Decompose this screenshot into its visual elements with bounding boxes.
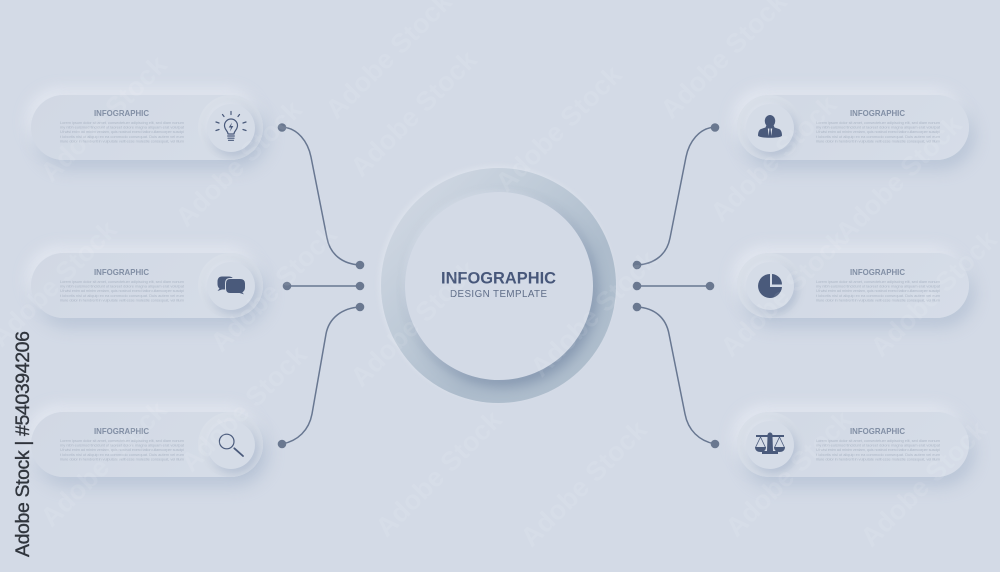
panel: right card 2: t lobortis nisl ut aliquip ex ea commodo consequat. Duis autem vel eum xyxy=(816,293,941,298)
panel: right card 3: t lobortis nisl ut aliquip ex ea commodo consequat. Duis autem vel eum xyxy=(816,452,941,457)
watermark: Adobe Stock repeated overlay: Adobe Stock xyxy=(345,254,483,393)
watermark: Adobe Stock repeated overlay: Adobe Stock xyxy=(830,109,968,248)
panel: left card 1: iriure dolor in hendrerit in vulputate velit esse molestie consequat, vel illum xyxy=(60,138,185,143)
panel: right card 3: Lorem ipsum dolor sit amet, consectetuer adipiscing elit, sed diam nonum xyxy=(816,438,941,443)
panel: left card 2: iriure dolor in hendrerit in vulputate velit esse molestie consequat, vel illum xyxy=(60,297,185,302)
icon: chat bubbles xyxy=(218,276,246,295)
icon: pie chart xyxy=(758,274,782,298)
watermark: Adobe Stock repeated overlay: Adobe Stock xyxy=(715,224,853,363)
panel: left card 3: Lorem ipsum dolor sit amet, consectetuer adipiscing elit, sed diam nonum xyxy=(60,438,185,443)
central disc with title: DESIGN TEMPLATE xyxy=(450,288,547,300)
panel: left card 1: Ut wisi enim ad minim veniam, quis nostrud exerci tation ullamcorper suscipi xyxy=(60,129,184,134)
central disc with title xyxy=(404,192,592,380)
panel: right card 1: INFOGRAPHIC xyxy=(850,109,905,118)
panel: left card 3: my nibh euismod tincidunt ut laoreet dolore magna aliquam erat volutpat xyxy=(60,443,185,448)
panel: left card 1: Lorem ipsum dolor sit amet, consectetuer adipiscing elit, sed diam nonum xyxy=(60,120,185,125)
icon: magnifier xyxy=(219,434,243,456)
watermark: Adobe Stock repeated overlay: Adobe Stock xyxy=(175,339,313,478)
panel: left card 3 xyxy=(31,412,263,477)
panel: left card 3: t lobortis nisl ut aliquip ex ea commodo consequat. Duis autem vel eum xyxy=(60,452,185,457)
watermark: Adobe Stock repeated overlay: Adobe Stock xyxy=(205,219,343,358)
panel: left card 1: t lobortis nisl ut aliquip ex ea commodo consequat. Duis autem vel eum xyxy=(60,134,185,139)
panel: right card 1: Ut wisi enim ad minim veniam, quis nostrud exerci tation ullamcorper suscipi xyxy=(816,129,940,134)
panel: right card 1: my nibh euismod tincidunt ut laoreet dolore magna aliquam erat volutpat xyxy=(816,125,941,130)
panel: right card 1: Lorem ipsum dolor sit amet, consectetuer adipiscing elit, sed diam nonum xyxy=(816,120,941,125)
panel: right card 2 xyxy=(737,253,969,318)
central disc with title: INFOGRAPHIC xyxy=(440,268,556,287)
watermark: Adobe Stock repeated overlay: Adobe Stock xyxy=(35,49,173,188)
watermark: Adobe Stock repeated overlay: Adobe Stock xyxy=(35,394,173,533)
icon: businessman xyxy=(758,115,782,138)
panel: right card 3: Ut wisi enim ad minim veniam, quis nostrud exerci tation ullamcorper suscipi xyxy=(816,447,940,452)
icon: light bulb xyxy=(216,112,246,140)
panel: right card 2: Lorem ipsum dolor sit amet, consectetuer adipiscing elit, sed diam nonum xyxy=(816,279,941,284)
panel: left card 3: INFOGRAPHIC xyxy=(94,427,149,436)
panel: right card 1: t lobortis nisl ut aliquip ex ea commodo consequat. Duis autem vel eum xyxy=(816,134,941,139)
panel: central ring xyxy=(381,168,616,403)
panel: right card 3: my nibh euismod tincidunt ut laoreet dolore magna aliquam erat volutpat xyxy=(816,443,941,448)
watermark: Adobe Stock repeated overlay: Adobe Stock xyxy=(525,244,663,383)
panel: left card 2: my nibh euismod tincidunt ut laoreet dolore magna aliquam erat volutpat xyxy=(60,284,185,289)
panel: right card 2: INFOGRAPHIC xyxy=(850,268,905,277)
watermark: Adobe Stock repeated overlay: Adobe Stock xyxy=(170,94,308,233)
panel: right card 2: my nibh euismod tincidunt ut laoreet dolore magna aliquam erat volutpat xyxy=(816,284,941,289)
panel: left card 2: Ut wisi enim ad minim veniam, quis nostrud exerci tation ullamcorper suscipi xyxy=(60,288,184,293)
vertical stock id label: Adobe Stock | #540394206 xyxy=(12,331,34,557)
panel: left card 3: iriure dolor in hendrerit in vulputate velit esse molestie consequat, vel illum xyxy=(60,456,185,461)
panel: right card 1 xyxy=(737,95,969,160)
panel: left card 2 xyxy=(31,253,263,318)
panel: right card 3: INFOGRAPHIC xyxy=(850,427,905,436)
panel: left card 2: t lobortis nisl ut aliquip ex ea commodo consequat. Duis autem vel eum xyxy=(60,293,185,298)
watermark: Adobe Stock repeated overlay: Adobe Stock xyxy=(705,89,843,228)
watermark: Adobe Stock repeated overlay: Adobe Stock xyxy=(345,44,483,183)
panel: right card 2: iriure dolor in hendrerit in vulputate velit esse molestie consequat, vel illum xyxy=(816,297,941,302)
watermark: Adobe Stock repeated overlay: Adobe Stock xyxy=(515,414,653,553)
watermark: Adobe Stock repeated overlay: Adobe Stock xyxy=(720,404,858,543)
panel: left card 2: Lorem ipsum dolor sit amet, consectetuer adipiscing elit, sed diam nonum xyxy=(60,279,185,284)
panel: left card 1: my nibh euismod tincidunt ut laoreet dolore magna aliquam erat volutpat xyxy=(60,125,185,130)
watermark: Adobe Stock repeated overlay: Adobe Stock xyxy=(865,224,1000,363)
panel: left card 2: INFOGRAPHIC xyxy=(94,268,149,277)
panel: left card 1: INFOGRAPHIC xyxy=(94,109,149,118)
panel: right card 2: Ut wisi enim ad minim veniam, quis nostrud exerci tation ullamcorper suscipi xyxy=(816,288,940,293)
icon: balance scale xyxy=(755,432,785,454)
panel: right card 1: iriure dolor in hendrerit in vulputate velit esse molestie consequat, vel illum xyxy=(816,138,941,143)
panel: right card 3: iriure dolor in hendrerit in vulputate velit esse molestie consequat, vel illum xyxy=(816,456,941,461)
watermark: Adobe Stock repeated overlay: Adobe Stock xyxy=(855,414,993,553)
panel: right card 3 xyxy=(737,412,969,477)
watermark: Adobe Stock repeated overlay: Adobe Stock xyxy=(490,59,628,198)
watermark: Adobe Stock repeated overlay: Adobe Stock xyxy=(370,404,508,543)
panel: left card 3: Ut wisi enim ad minim veniam, quis nostrud exerci tation ullamcorper suscipi xyxy=(60,447,184,452)
panel: left card 1 xyxy=(31,95,263,160)
